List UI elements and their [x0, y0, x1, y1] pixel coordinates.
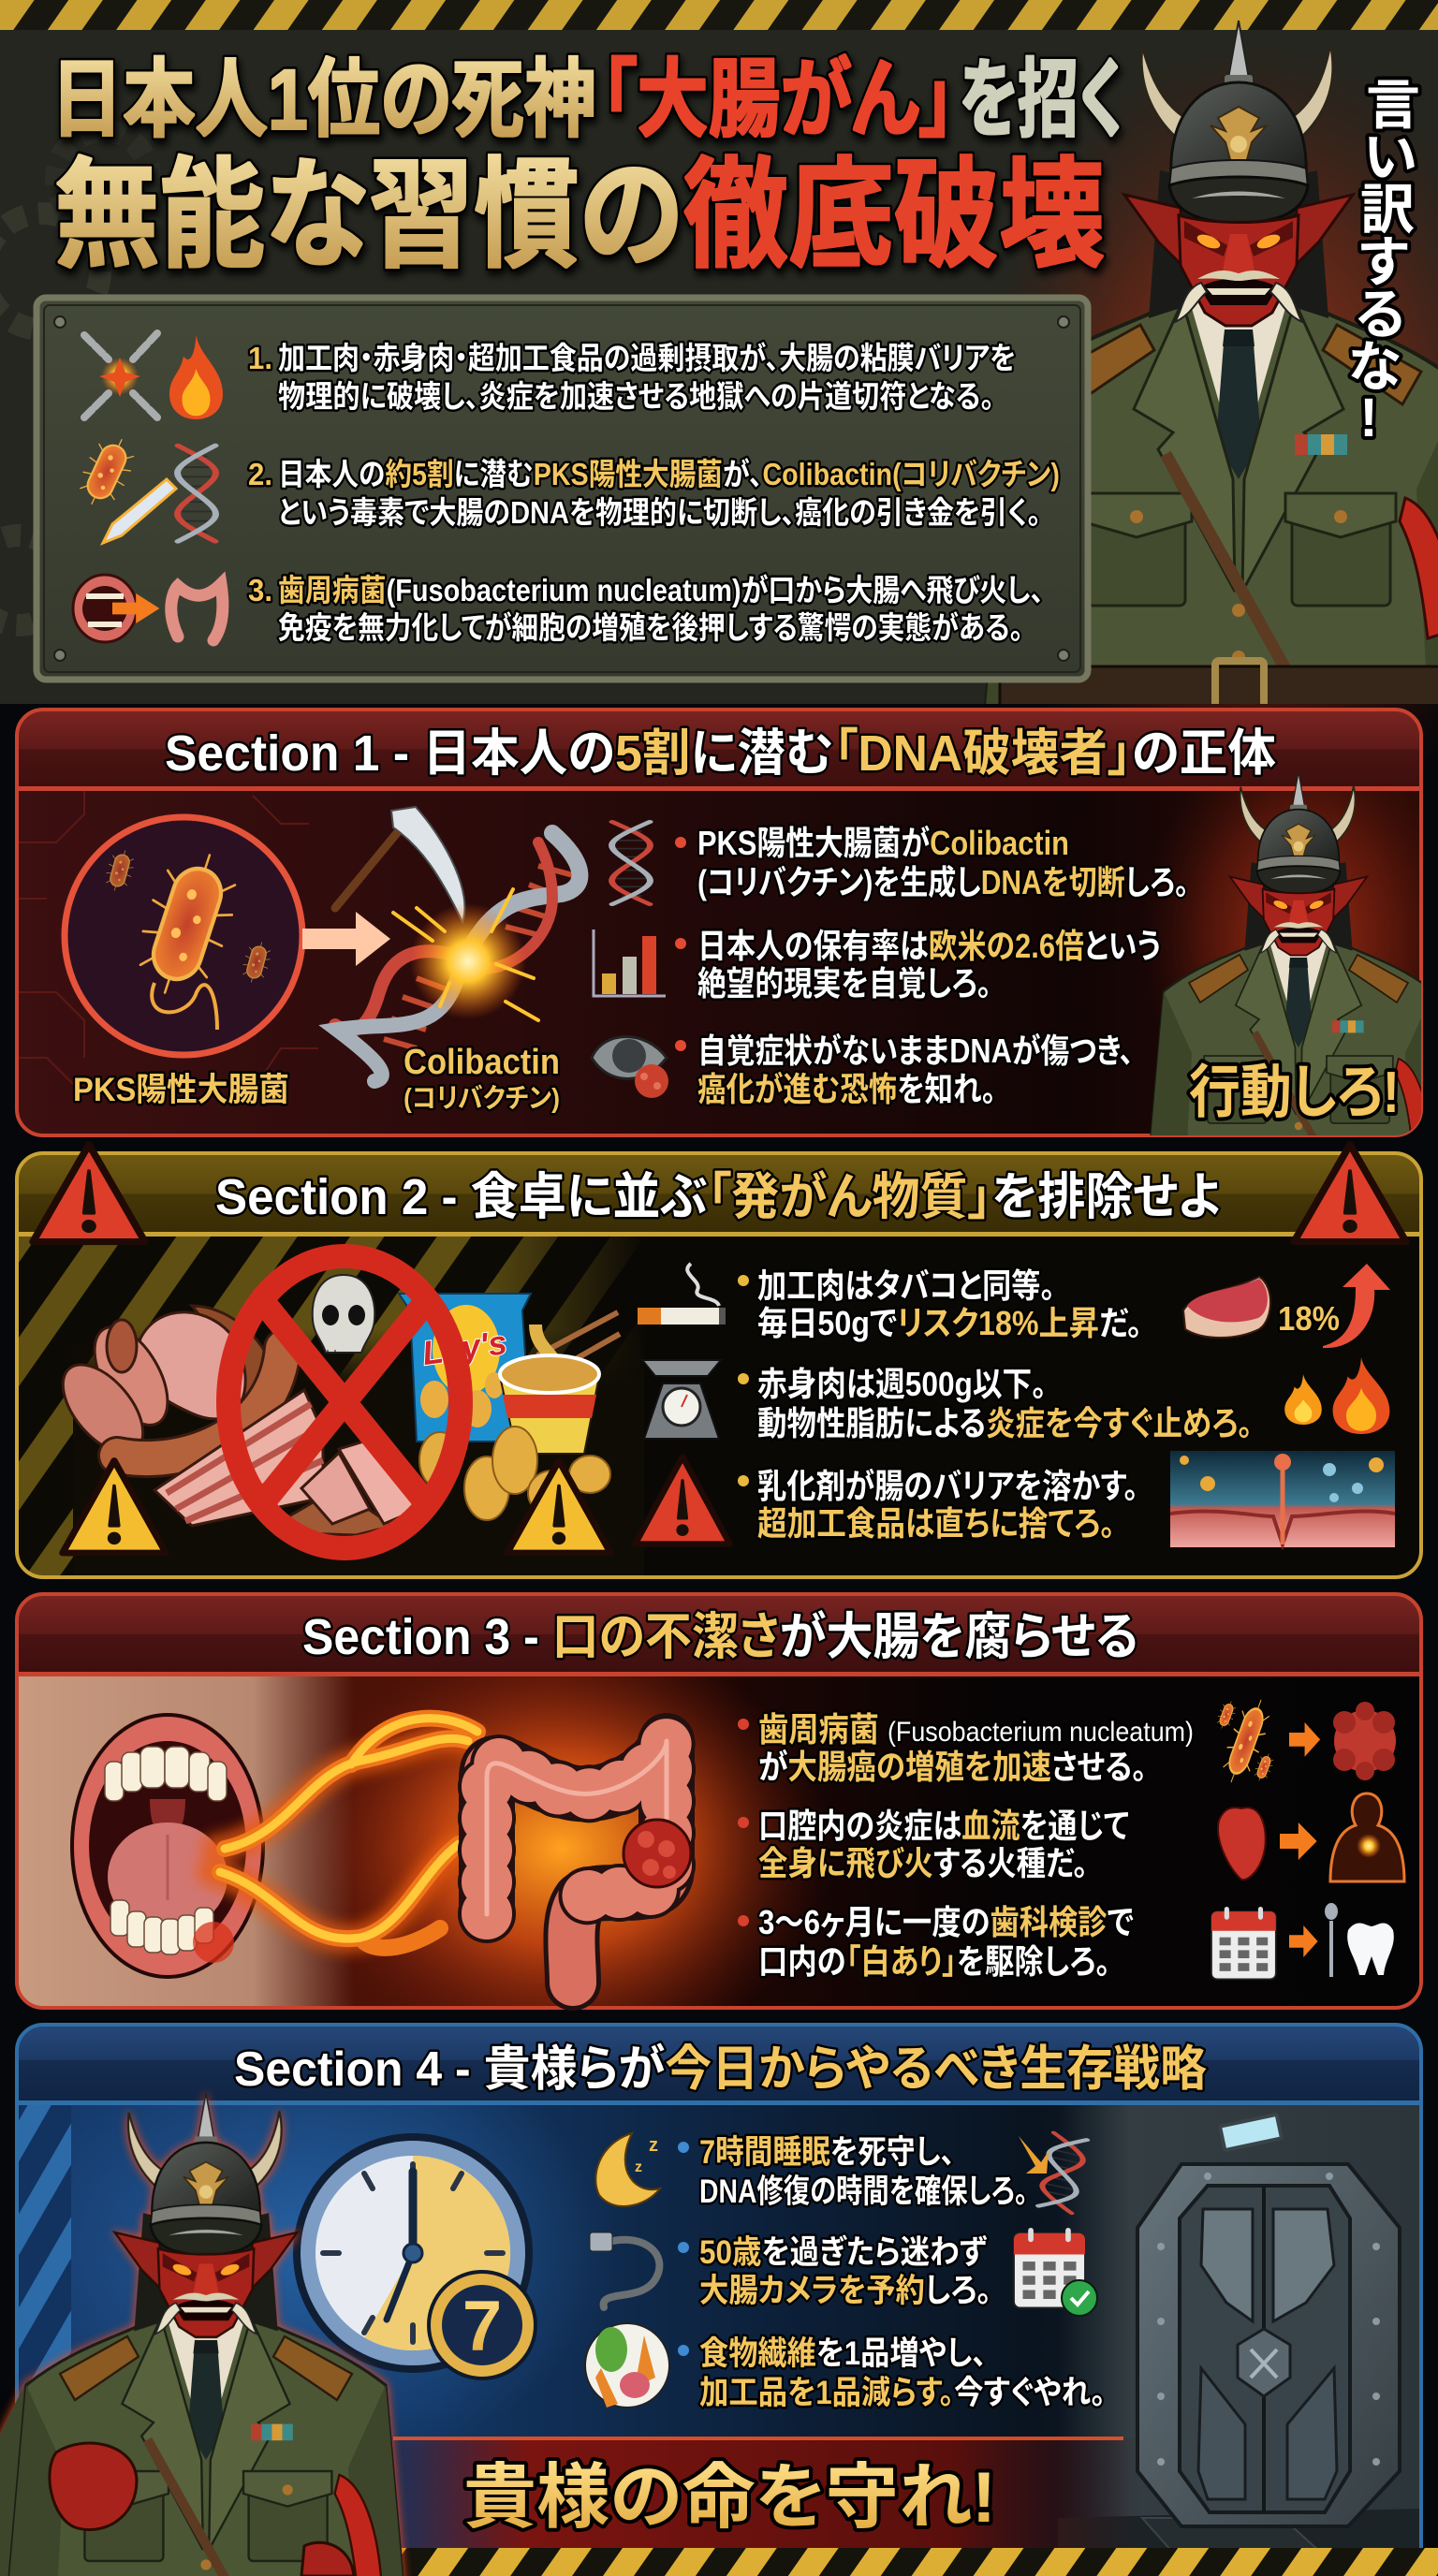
illustration: processed meats: [48, 1306, 423, 1535]
bullet list section 2: 超加工食品は直ちに捨てろ。: [757, 1504, 1115, 1543]
icon: plate of vegetables: [585, 2323, 669, 2408]
illustration: chips bag: [399, 1294, 531, 1442]
character: oni officer bottom left: [0, 2093, 412, 2576]
summary item 2: [248, 457, 1060, 530]
character: oni officer section 1: [1150, 771, 1421, 1135]
icon: warning red: [635, 1456, 730, 1544]
icon: flames: [1284, 1357, 1389, 1434]
illustration: scythe cutting DNA: [335, 807, 580, 1081]
label: 18%: 18%: [1278, 1299, 1340, 1338]
bullet list section 3: [738, 1710, 1194, 1981]
icon: bacteria to cancer cell: [1214, 1695, 1396, 1787]
title line 1 part: red: 「大腸がん」: [601, 52, 955, 148]
summary item 3: 免疫を無力化してが細胞の増殖を後押しする驚愕の実態がある。: [278, 610, 1023, 645]
icon: crescent moon: z: [649, 2135, 658, 2156]
icon: endoscope: [590, 2232, 659, 2307]
bullet list section 1: 癌化が進む恐怖を知れ。: [697, 1070, 996, 1108]
icon: broken chain and flame: [84, 333, 223, 419]
illustration: emulsifier on gut barrier: [1170, 1451, 1395, 1547]
summary item 2: という毒素で大腸のDNAを物理的に切断し、癌化の引き金を引く。: [278, 495, 1041, 530]
arrow: [302, 912, 390, 966]
label: PKS bacterium: PKS陽性大腸菌: [73, 1072, 289, 1108]
top hazard stripes: [0, 0, 1438, 30]
icon: heart to body: [1218, 1793, 1404, 1881]
bullet list section 2: 乳化剤が腸のバリアを溶かす。: [757, 1467, 1138, 1505]
icon: bar chart: [594, 929, 666, 996]
header background: [0, 0, 1438, 861]
bullet list section 4: 50歳を過ぎたら迷わず: [699, 2234, 988, 2271]
panel: section 3: [15, 1592, 1423, 2011]
bottom hazard stripes: [0, 2548, 1438, 2576]
brand label: Lay's: [420, 1323, 509, 1372]
icon: warning yellow right: [507, 1460, 610, 1553]
illustration: open mouth: [72, 1715, 263, 1977]
icon: crescent moon: [595, 2133, 660, 2206]
bullet list section 1: 自覚症状がないままDNAが傷つき、: [697, 1032, 1134, 1070]
bullet list section 4: DNA修復の時間を確保しろ。: [699, 2174, 1028, 2210]
bullet list section 4: 食物繊維を1品増やし、: [699, 2335, 987, 2372]
title line 2: 無能な習慣の徹底破壊: [54, 149, 1105, 283]
icon: bacterium, blade and DNA: [73, 431, 215, 543]
section 4 heading: Section 4 - 貴様らが今日からやるべき生存戦略: [234, 2042, 1207, 2097]
bullet list section 1: 絶望的現実を自覚しろ。: [697, 964, 991, 1003]
title line 1 part: gold: 日本人1位の死神: [51, 52, 596, 148]
icon: calendar, dental mirror and tooth: [1211, 1903, 1394, 1979]
bullet list section 3: 口腔内の炎症は血流を通じて: [758, 1807, 1129, 1845]
bullet list section 3: 全身に飛び火する火種だ。: [758, 1844, 1088, 1882]
bullet list section 4: 大腸カメラを予約しろ。: [699, 2273, 991, 2309]
bullet list section 2: 毎日50gでリスク18%上昇だ。: [757, 1304, 1142, 1342]
arrow: risk up: [1323, 1264, 1390, 1348]
icon: skull: [313, 1275, 374, 1353]
summary item 3: 歯周病菌(Fusobacterium nucleatum)が口から大腸へ飛び火し、: [278, 573, 1044, 607]
illustration: PKS bacterium: [65, 817, 302, 1055]
bullet list section 3: 口内の「白あり」を駆除しろ。: [758, 1942, 1110, 1981]
label: Colibactin: Colibactin: [404, 1043, 560, 1082]
callout: protect your life: 貴様の命を守れ!: [463, 2458, 996, 2538]
bullet list section 4: 7時間睡眠を死守し、: [699, 2134, 955, 2171]
bullet list section 3: 歯周病菌 (Fusobacterium nucleatum): [758, 1710, 1194, 1749]
callout: act now: 行動しろ!: [1189, 1061, 1400, 1125]
illustration: vault door: [1058, 2102, 1421, 2576]
summary item 2: 2.: [248, 457, 272, 491]
summary item 3: 3.: [248, 573, 272, 607]
panel: section 1: [15, 708, 1423, 1137]
bullet list section 1: [675, 824, 1189, 1108]
icon: cigarette: [638, 1264, 726, 1325]
panel: summary: [37, 298, 1088, 680]
summary item 1: 1.: [248, 341, 272, 375]
icon: steak: [1183, 1277, 1270, 1338]
illustration: cup noodles: [500, 1312, 620, 1454]
bullet list section 2: 動物性脂肪による炎症を今すぐ止めろ。: [757, 1404, 1253, 1442]
bullet list section 2: [738, 1266, 1253, 1543]
icon: eye with tumour: [592, 1037, 668, 1098]
label: Colibactin: [404, 1043, 560, 1114]
icon: DNA repair: [1019, 2132, 1087, 2213]
illustration: colon with tumour: [487, 1741, 691, 1983]
vertical slogan: 言い訳するな!: [1348, 75, 1420, 448]
bullet list section 3: が大腸癌の増殖を加速させる。: [758, 1748, 1147, 1786]
section 3 heading: Section 3 - 口の不潔さが大腸を腐らせる: [302, 1609, 1138, 1665]
icon: warning yellow left: [63, 1460, 166, 1553]
panel: section 2: [17, 1145, 1421, 1577]
icon: DNA damage: [612, 822, 650, 904]
section 2 heading: Section 2 - 食卓に並ぶ「発がん物質」を排除せよ: [215, 1169, 1221, 1225]
title line 1 part: grey: を招く: [960, 52, 1123, 148]
illustration: 7-hour clock: [293, 2133, 533, 2373]
bullet list section 3: 3〜6ヶ月に一度の歯科検診で: [758, 1903, 1134, 1941]
character: oni officer top right: [981, 21, 1438, 769]
summary item 3: [248, 573, 1044, 645]
icon: calendar with check: [1014, 2228, 1097, 2316]
icon: prohibition sign over food: [228, 1256, 461, 1548]
badge: 7: [429, 2272, 536, 2378]
icon: warning left: [33, 1145, 145, 1242]
summary item 2: 日本人の約5割に潜むPKS陽性大腸菌が、Colibactin(コリバクチン): [278, 457, 1060, 491]
bullet list section 4: [678, 2134, 1106, 2411]
banner background: [374, 2438, 1142, 2548]
badge: 7: 7: [462, 2287, 502, 2366]
icon: warning right: [1294, 1145, 1406, 1242]
bullet list section 1: (コリバクチン)を生成しDNAを切断しろ。: [697, 863, 1189, 901]
bullet list section 4: 加工品を1品減らす。今すぐやれ。: [699, 2375, 1106, 2411]
bullet list section 2: 加工肉はタバコと同等。: [757, 1266, 1055, 1305]
section 1 heading: Section 1 - 日本人の5割に潜む「DNA破壊者」の正体: [165, 725, 1276, 782]
title: [51, 52, 1123, 283]
summary item 1: [248, 341, 1016, 414]
illustration: chips pile: [419, 1427, 610, 1520]
icon: crescent moon: z: [635, 2159, 642, 2175]
summary item 1: 加工肉・赤身肉・超加工食品の過剰摂取が、大腸の粘膜バリアを: [278, 341, 1016, 375]
label: Colibactin: (コリバクチン): [404, 1084, 560, 1114]
bullet list section 1: PKS陽性大腸菌がColibactin: [697, 824, 1069, 862]
summary item 1: 物理的に破壊し、炎症を加速させる地獄への片道切符となる。: [278, 379, 994, 414]
panel: section 4: [0, 2025, 1438, 2576]
illustration: flames from mouth to colon: [211, 1719, 477, 1948]
bullet list section 1: 日本人の保有率は欧米の2.6倍という: [697, 927, 1161, 965]
icon: mouth to colon: [73, 575, 223, 642]
bullet list section 2: 赤身肉は週500g以下。: [757, 1365, 1047, 1403]
icon: scale: [642, 1360, 721, 1439]
